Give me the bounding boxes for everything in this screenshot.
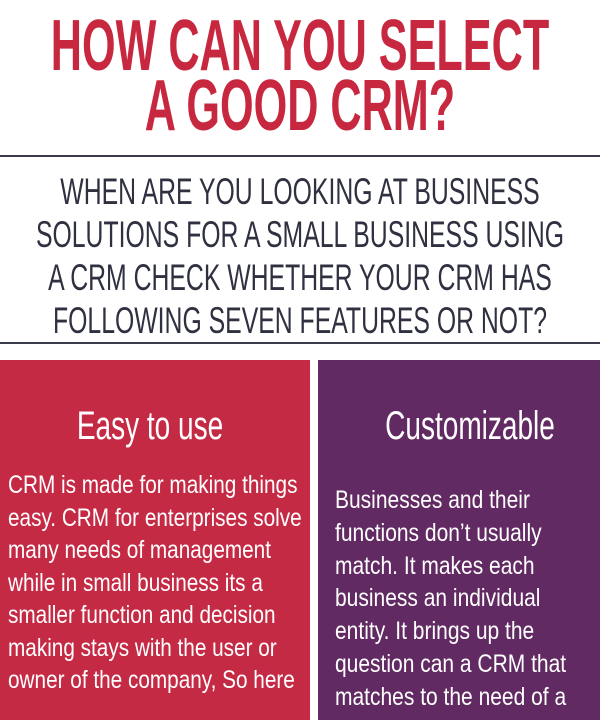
body text: customizable: functions don’t usually (335, 519, 542, 547)
panel: easy to use (0, 360, 310, 720)
body text: easy to use: easy. CRM for enterprises solve (8, 504, 302, 532)
body text: easy to use: owner of the company, So here (8, 666, 295, 694)
body text: customizable: match. It makes each (335, 552, 535, 580)
title: A GOOD CRM? (145, 66, 455, 146)
body text: easy to use: making stays with the user or (8, 634, 277, 662)
subtitle question: SOLUTIONS FOR A SMALL BUSINESS USING (36, 214, 564, 255)
heading: customizable: Customizable (385, 404, 555, 448)
subtitle question (36, 171, 564, 341)
body text: customizable: matches to the need of a (335, 683, 566, 711)
title (51, 6, 549, 146)
subtitle question: WHEN ARE YOU LOOKING AT BUSINESS (60, 171, 540, 212)
body text: customizable: business an individual (335, 584, 540, 612)
body text: customizable: question can a CRM that (335, 650, 566, 678)
body text: customizable: entity. It brings up the (335, 617, 534, 645)
subtitle question: FOLLOWING SEVEN FEATURES OR NOT? (53, 300, 547, 341)
body text: easy to use (8, 471, 302, 694)
body text: easy to use: CRM is made for making things (8, 471, 297, 499)
subtitle question: A CRM CHECK WHETHER YOUR CRM HAS (48, 257, 552, 298)
body text: easy to use: smaller function and decision (8, 601, 276, 629)
body text: customizable (335, 486, 566, 711)
title: HOW CAN YOU SELECT (51, 6, 549, 86)
body text: easy to use: while in small business its a (8, 568, 263, 596)
body text: customizable: Businesses and their (335, 486, 530, 514)
body text: easy to use: many needs of management (8, 536, 271, 564)
panel: customizable (318, 360, 600, 720)
heading: easy to use: Easy to use (77, 404, 223, 448)
